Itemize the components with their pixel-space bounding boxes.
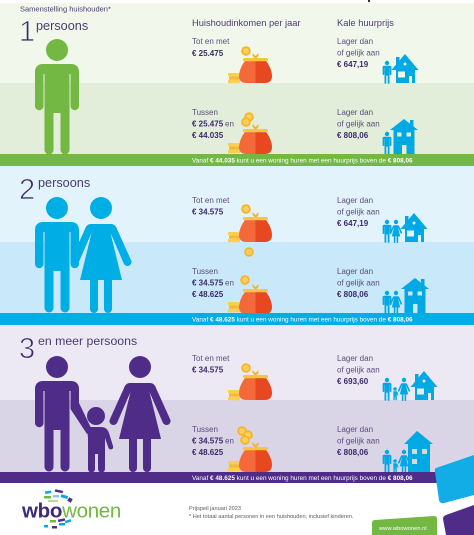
rent text 2b: of gelijk aan — [337, 278, 380, 288]
bar: 3 persoons note — [0, 472, 474, 483]
rent text 1a: € 647,19 — [337, 60, 369, 69]
income text 1b: € 25.475 — [192, 120, 224, 128]
income text 3b: € 34.575 — [192, 436, 224, 446]
income text 1b: € 44.035 — [192, 131, 224, 140]
logo: squares — [44, 489, 73, 528]
bar: 1 persoons note — [0, 154, 474, 166]
logo: wordmark: wbowonen — [21, 500, 121, 522]
income text 3b: € 48.625 — [192, 448, 224, 457]
rent text 3b: Lager dan — [337, 425, 373, 434]
decorative corner: purple tab — [443, 505, 474, 535]
income text 2a: € 34.575 — [192, 208, 224, 216]
bar: 2 persoons note: Vanaf € 48.625 kunt u een woning huren met een huurprijs boven de € 808,06 — [192, 316, 413, 324]
heading: 2 persoons: 2 — [19, 174, 35, 206]
income text 3a: € 34.575 — [192, 366, 224, 374]
rent text 1b: Lager dan — [337, 108, 373, 117]
rent text 2a: of gelijk aan — [337, 208, 380, 216]
logo: wbowonen — [21, 489, 121, 528]
income text 2a: Tot en met — [192, 196, 229, 205]
heading: 2 persoons — [19, 174, 90, 206]
income text 2b: € 34.575 — [192, 278, 224, 288]
heading: samenstelling huishouden: Samenstelling huishouden* — [20, 4, 111, 14]
rent text 3a: Lager dan — [337, 354, 373, 363]
heading: 3 en meer persoons: 3 — [19, 333, 35, 365]
rent text 3b: € 808,06 — [337, 448, 369, 457]
icon: person — [35, 39, 79, 154]
income text 1b: Tussen — [192, 108, 218, 117]
rent text 3a: of gelijk aan — [337, 366, 380, 374]
rent text 1b: of gelijk aan — [337, 120, 380, 128]
rent text 1b: € 808,06 — [337, 131, 369, 140]
bar: 1 persoons note: Vanaf € 44.035 kunt u een woning huren met een huurprijs boven de € 808,06 — [192, 158, 413, 164]
rent text 1a: Lager dan — [337, 37, 373, 46]
footer note: Prijspeil januari 2023 — [189, 506, 241, 512]
rent text 1a: of gelijk aan — [337, 48, 380, 58]
heading: 1 persoons: persoons — [36, 19, 88, 33]
rent text 2a: Lager dan — [337, 196, 373, 205]
button: website: www.wbowonen.nl — [378, 526, 427, 532]
income text 3b: Tussen — [192, 425, 218, 434]
heading: 3 en meer persoons: en meer persoons — [38, 334, 137, 348]
bar: 3 persoons note: Vanaf € 48.625 kunt u een woning huren met een huurprijs boven de € 808,06 — [192, 475, 413, 482]
income text 1b: en — [225, 120, 234, 128]
decorative corner: blue tab — [435, 455, 474, 503]
income text 3b: en — [225, 436, 234, 446]
income text 2b: € 48.625 — [192, 290, 224, 299]
income text 1a: € 25.475 — [192, 49, 224, 58]
rent text 3b: of gelijk aan — [337, 436, 380, 446]
icon: family and tall house 3b — [383, 431, 433, 473]
rent text 2b: € 808,06 — [337, 290, 369, 299]
icon: purse 3b — [228, 426, 272, 472]
button: website — [372, 516, 437, 535]
column heading: rent: Kale huurprijs — [337, 18, 394, 28]
income text 2b: Tussen — [192, 267, 218, 276]
rent text 3a: € 693,60 — [337, 377, 369, 386]
panel: 3 en meer persoons — [0, 325, 474, 483]
icon: family — [35, 356, 171, 472]
icon: person and house 1a — [383, 54, 418, 84]
footer note: * Het totaal aantal personen in een huishouden, inclusief kinderen. — [189, 514, 354, 520]
rent text 2b: Lager dan — [337, 267, 373, 276]
rent text 2a: € 647,19 — [337, 219, 369, 228]
icon: couple and house 2b — [383, 278, 429, 314]
icon: purse 2b — [228, 247, 272, 314]
panel: 1 persoons — [0, 3, 474, 166]
bar: 2 persoons note — [0, 313, 474, 325]
icon: purse 2a — [228, 204, 272, 242]
icon: purse 1a — [228, 46, 272, 83]
income text 1a: Tot en met — [192, 37, 229, 46]
icon: family and house 3a — [383, 371, 438, 401]
income text 2b: en — [225, 278, 234, 288]
income text 3a: Tot en met — [192, 354, 229, 363]
heading: 1 persoons — [19, 16, 88, 48]
icon: couple — [35, 197, 132, 313]
icon: couple and house 2a — [383, 213, 428, 243]
heading: 3 en meer persoons — [19, 333, 137, 365]
heading: 2 persoons: persoons — [38, 176, 90, 190]
icon: purse 1b — [228, 112, 272, 154]
column heading: income: Huishoudinkomen per jaar — [192, 18, 301, 28]
panel: 2 persoons — [0, 166, 474, 325]
icon: person and house 1b — [383, 119, 418, 155]
icon: purse 3a — [228, 363, 272, 400]
heading: 1 persoons: 1 — [19, 16, 35, 48]
